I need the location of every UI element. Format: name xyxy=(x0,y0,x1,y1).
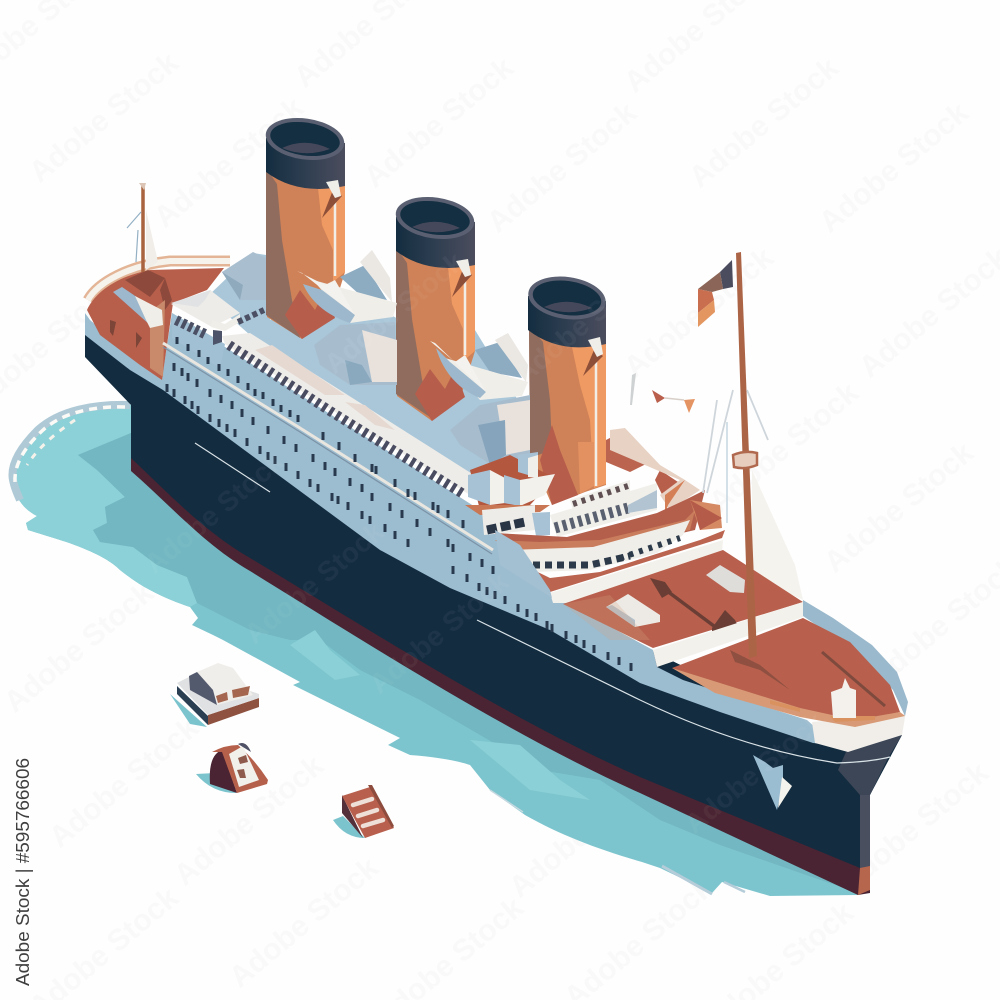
watermark pattern: Adobe Stock xyxy=(23,46,185,189)
bow flare xyxy=(838,735,902,795)
water under the ship xyxy=(11,404,858,896)
watermark pattern: Adobe Stock xyxy=(618,241,780,384)
small boat xyxy=(170,663,259,727)
pennants xyxy=(652,390,695,413)
cabin window strip xyxy=(229,345,465,495)
anchor mark xyxy=(753,755,783,810)
flag xyxy=(698,260,733,327)
stern deck xyxy=(87,183,230,380)
main roof deck xyxy=(222,333,490,500)
watermark pattern: Adobe Stock xyxy=(503,761,665,904)
upper tier xyxy=(532,512,550,536)
aft bridge deckhouse xyxy=(171,290,264,368)
domes and vents on boat deck xyxy=(222,252,530,467)
hatch right xyxy=(706,565,745,593)
superstructure blue side xyxy=(85,313,835,745)
stern rust deck xyxy=(87,268,224,380)
bow rust deck xyxy=(672,618,905,727)
lower rust tier xyxy=(513,530,725,592)
funnel 1 xyxy=(263,113,347,339)
watermark pattern: Adobe Stock xyxy=(358,51,520,194)
watermark pattern: Adobe Stock xyxy=(813,96,975,239)
hull navy body xyxy=(85,333,902,870)
foam ring at stern xyxy=(12,405,130,500)
watermark pattern: Adobe Stock xyxy=(223,851,385,994)
central blue-grey boat deck xyxy=(207,253,530,480)
crow's nest xyxy=(733,452,757,468)
white rim at bow xyxy=(812,705,907,752)
rust deck tier xyxy=(495,490,705,555)
funnel 3 xyxy=(525,272,609,505)
watermark over ship: Adobe Stock xyxy=(363,566,515,700)
watermark over ship: Adobe Stock xyxy=(678,706,830,840)
arched hatch xyxy=(196,743,268,793)
stern deckhouse xyxy=(113,287,160,325)
portholes xyxy=(167,337,631,671)
watermark pattern: Adobe Stock xyxy=(0,576,160,719)
midship deckhouses xyxy=(465,452,555,535)
stern mast and sail xyxy=(146,210,158,270)
funnel 2 xyxy=(393,192,477,421)
stock id caption: Adobe Stock | #595766606 xyxy=(13,758,33,986)
watermark over ship: Adobe Stock xyxy=(318,246,470,380)
watermark pattern: Adobe Stock xyxy=(818,436,980,579)
watermark pattern: Adobe Stock xyxy=(481,96,643,239)
watermark over ship xyxy=(138,246,830,840)
watermark pattern: Adobe Stock xyxy=(833,756,995,899)
hatch xyxy=(606,594,660,627)
watermark pattern: Adobe Stock xyxy=(703,376,865,519)
watermark pattern: Adobe Stock xyxy=(43,711,205,854)
lower white tier xyxy=(550,540,723,603)
wake streaks at bow xyxy=(490,790,745,894)
watermark over ship: Adobe Stock xyxy=(138,446,290,580)
white stripe along superstructure xyxy=(163,343,493,550)
hull highlight lines xyxy=(195,443,890,763)
watermark pattern: Adobe Stock xyxy=(168,749,330,892)
fore sail behind mast xyxy=(752,470,803,600)
watermark over ship: Adobe Stock xyxy=(508,256,660,390)
boot topping maroon stripe xyxy=(131,458,870,895)
middle white tier xyxy=(510,520,690,572)
watermark over ship: Adobe Stock xyxy=(238,516,390,650)
bow blue rail xyxy=(803,600,908,716)
watermark pattern: Adobe Stock xyxy=(148,91,310,234)
boarding stairs xyxy=(333,785,394,838)
foremast xyxy=(630,252,768,658)
watermark pattern: Adobe Stock xyxy=(683,51,845,194)
cargo crane xyxy=(655,582,722,632)
stern rail xyxy=(88,261,230,300)
blue deck lower edge near bridge xyxy=(495,530,552,598)
bridge tiers xyxy=(495,428,725,603)
rigging xyxy=(703,390,768,493)
hull xyxy=(85,333,902,895)
lifeboat 1 xyxy=(297,250,397,323)
white forward wall xyxy=(653,602,803,667)
stem xyxy=(860,795,870,868)
lifeboat 2 xyxy=(430,333,528,400)
forward rust deck xyxy=(563,550,803,648)
